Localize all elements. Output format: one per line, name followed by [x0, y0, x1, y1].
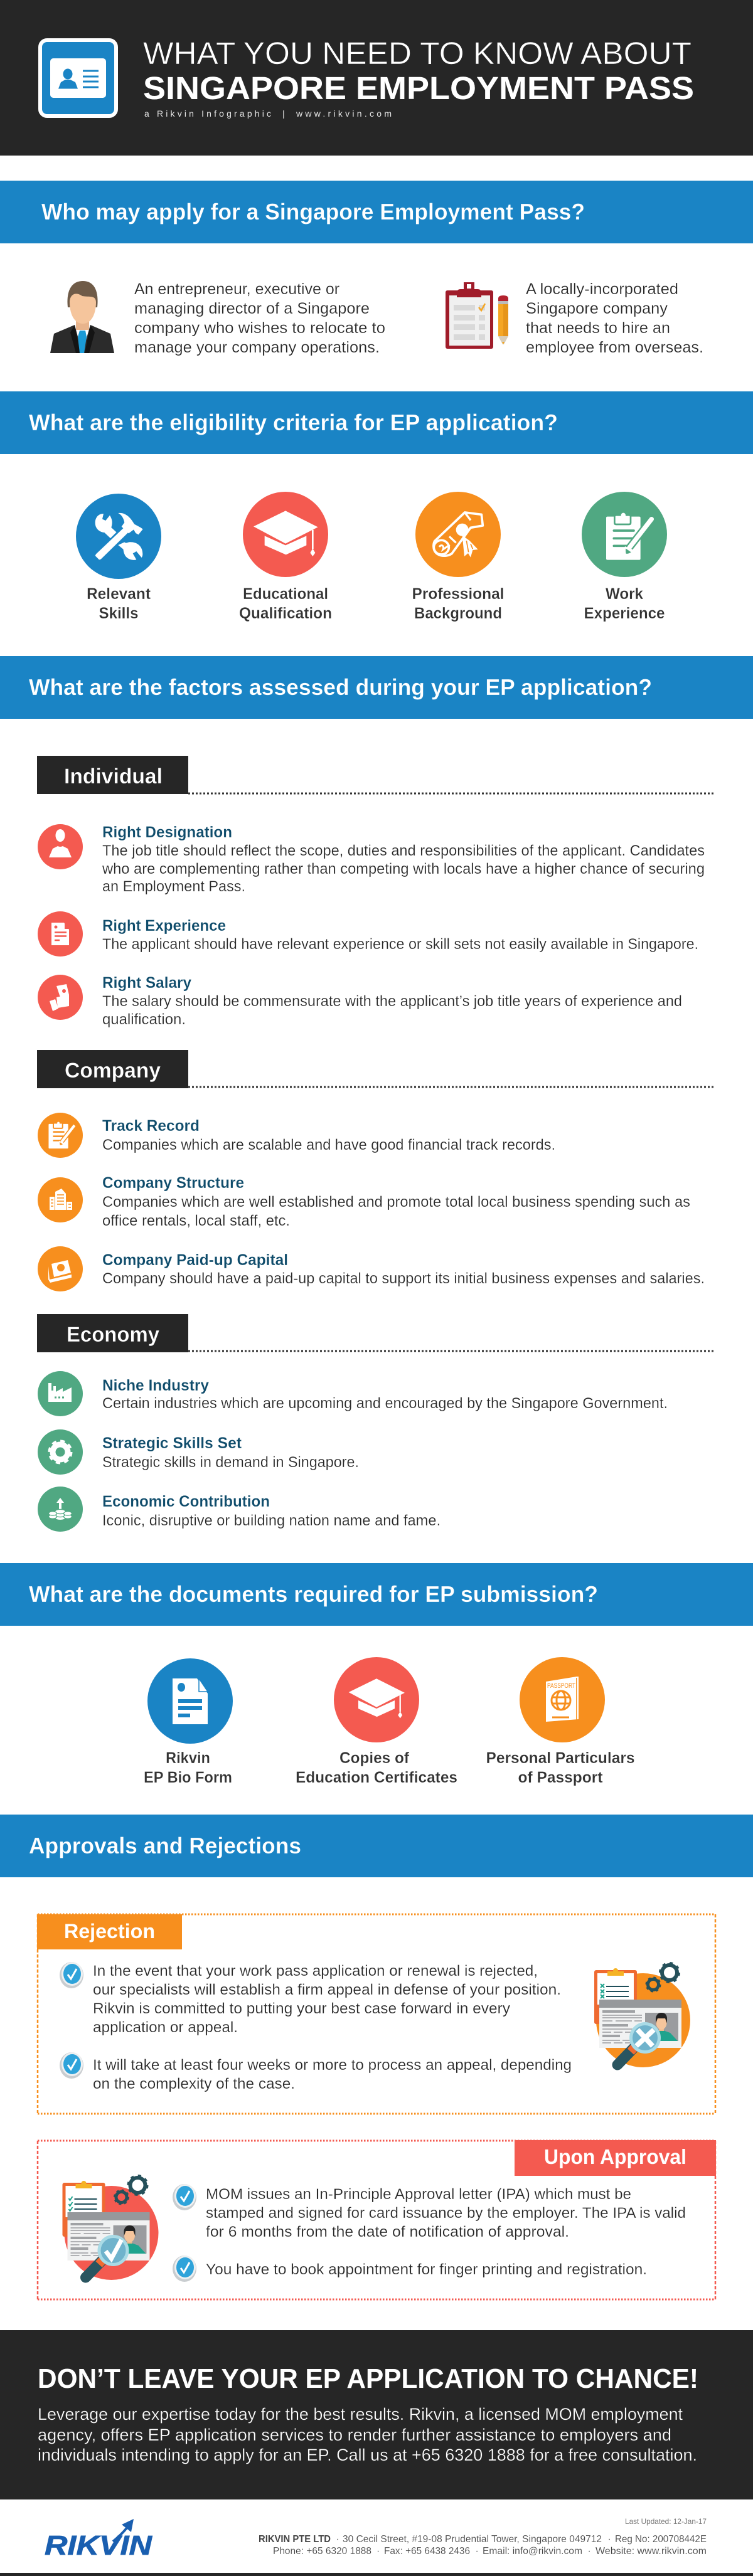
- text: finger printing: You have to book appointment for finger printing and registration.: [206, 2261, 647, 2278]
- label: passport particulars: [486, 1749, 635, 1786]
- sub-heading: company: Company: [65, 1059, 161, 1083]
- title: [143, 36, 694, 106]
- sub-heading: individual: Individual: [64, 765, 163, 788]
- text: right designation: who are complementing rather than competing with locals have a higher chance of securing: [102, 861, 705, 877]
- text: company structure: Companies which are well established and promote total local business spending such as: [102, 1194, 690, 1211]
- text: appeal duration: on the complexity of the case.: [93, 2075, 295, 2092]
- text: locally-incorporated company: A locally-incorporated: [526, 280, 678, 298]
- call to action text: [38, 2405, 697, 2464]
- text: right salary: qualification.: [102, 1011, 186, 1028]
- logo: Rikvin: [45, 2519, 152, 2561]
- tag: upon approval: Upon Approval: [544, 2145, 686, 2168]
- text: company structure: office rentals, local staff, etc.: [102, 1212, 290, 1229]
- sub-heading: individual: [37, 756, 715, 794]
- label: passport particulars: of Passport: [518, 1769, 603, 1786]
- text: niche industry: Niche Industry: [102, 1377, 209, 1394]
- text: rejection appeal: Rikvin is committed to putting your best case forward in every: [93, 2000, 510, 2017]
- call to action heading: DON’T LEAVE YOUR EP APPLICATION TO CHANCE!: [38, 2363, 698, 2394]
- text: company structure: [102, 1174, 690, 1229]
- icon: right designation: [38, 824, 83, 869]
- icon: niche industry: [38, 1371, 83, 1416]
- footer: company details: 30 Cecil Street, #19-08 Prudential Tower, Singapore 049712: [343, 2534, 602, 2545]
- label: work experience: Experience: [584, 605, 665, 622]
- icon: professional background: [415, 492, 501, 577]
- label: work experience: Work: [606, 585, 643, 603]
- panel: upon approval: [38, 2140, 716, 2299]
- text: right salary: Right Salary: [102, 974, 191, 992]
- label: passport particulars: Personal Particulars: [486, 1749, 635, 1767]
- text: strategic skills set: [102, 1434, 359, 1471]
- text: company paid-up capital: Company should have a paid-up capital to support its initial business expenses and salaries.: [102, 1270, 705, 1287]
- label: education certificates: Education Certificates: [296, 1769, 457, 1786]
- section heading: approvals and rejections: [0, 1815, 753, 1877]
- section heading: documents required: [0, 1563, 753, 1626]
- text: locally-incorporated company: Singapore company: [526, 300, 668, 317]
- title: WHAT YOU NEED TO KNOW ABOUT: [143, 36, 692, 71]
- icon: right salary: [38, 975, 83, 1020]
- text: track record: Track Record: [102, 1117, 200, 1135]
- text: strategic skills set: Strategic skills in demand in Singapore.: [102, 1454, 359, 1471]
- text: entrepreneur applicant: manage your company operations.: [134, 339, 380, 356]
- label: bio form: EP Bio Form: [144, 1769, 232, 1786]
- text: right designation: The job title should reflect the scope, duties and responsibilities of the applicant. Candidates: [102, 842, 705, 859]
- text: track record: [102, 1117, 555, 1153]
- footer: company details: RIKVIN PTE LTD: [259, 2534, 331, 2545]
- label: educational qualification: [239, 585, 332, 622]
- subtitle: a Rikvin Infographic: [144, 109, 271, 119]
- label: relevant skills: [87, 585, 151, 622]
- text: entrepreneur applicant: An entrepreneur, executive or: [134, 280, 339, 298]
- label: relevant skills: Relevant: [87, 585, 151, 603]
- footer: company details: [259, 2517, 707, 2557]
- text: right designation: an Employment Pass.: [102, 878, 245, 895]
- icon: relevant skills: [76, 494, 161, 579]
- text: locally-incorporated company: employee from overseas.: [526, 339, 703, 356]
- tag: rejection: [37, 1914, 182, 1949]
- text: right designation: [102, 824, 705, 895]
- text: niche industry: [102, 1377, 668, 1412]
- tag: upon approval: [515, 2140, 716, 2176]
- footer: company details: ·: [607, 2534, 611, 2545]
- text: appeal duration: It will take at least four weeks or more to process an appeal, depending: [93, 2057, 572, 2074]
- section heading: eligibility criteria: [0, 391, 753, 454]
- subtitle: www.rikvin.com: [296, 109, 392, 119]
- text: niche industry: Certain industries which are upcoming and encouraged by the Singapore Government.: [102, 1395, 668, 1412]
- label: education certificates: [296, 1749, 457, 1786]
- icon: check badge: [60, 2052, 83, 2079]
- text: right salary: [102, 974, 682, 1028]
- icon: check badge: [60, 1962, 83, 1988]
- text: strategic skills set: Strategic Skills Set: [102, 1434, 242, 1452]
- text: appeal duration: [93, 2057, 572, 2092]
- text: entrepreneur applicant: company who wishes to relocate to: [134, 319, 385, 337]
- text: rejection appeal: application or appeal.: [93, 2019, 238, 2036]
- text: locally-incorporated company: that needs to hire an: [526, 319, 670, 337]
- footer: company details: Last Updated: 12-Jan-17: [625, 2517, 707, 2526]
- icon: check badge: [173, 2255, 196, 2282]
- icon: passport: PASSPORT: [547, 1682, 575, 1690]
- title: SINGAPORE EMPLOYMENT PASS: [143, 70, 694, 106]
- icon: educational qualification: [243, 492, 328, 577]
- section heading: who may apply: [0, 181, 753, 243]
- section heading: who may apply: Who may apply for a Singapore Employment Pass?: [41, 199, 585, 225]
- footer: company details: Email: info@rikvin.com: [483, 2546, 582, 2557]
- section heading: documents required: What are the documents required for EP submission?: [29, 1581, 598, 1607]
- footer: company details: ·: [336, 2534, 339, 2545]
- section heading: approvals and rejections: Approvals and Rejections: [29, 1833, 301, 1858]
- text: approval letter: [206, 2186, 686, 2240]
- text: economic contribution: [102, 1493, 441, 1529]
- icon: track record: [38, 1113, 83, 1158]
- text: approval letter: for 6 months from the date of notification of approval.: [206, 2224, 569, 2240]
- text: right experience: The applicant should have relevant experience or skill sets not easily available in Singapore.: [102, 936, 698, 953]
- text: company paid-up capital: [102, 1251, 705, 1287]
- text: company paid-up capital: Company Paid-up Capital: [102, 1251, 288, 1269]
- label: professional background: Background: [414, 605, 502, 622]
- text: economic contribution: Iconic, disruptive or building nation name and fame.: [102, 1512, 441, 1529]
- label: educational qualification: Educational: [243, 585, 328, 603]
- sub-heading: economy: [37, 1314, 715, 1352]
- text: rejection appeal: In the event that your work pass application or renewal is rejected,: [93, 1963, 538, 1980]
- subtitle: |: [282, 109, 285, 119]
- panel: rejection: [37, 1914, 715, 2114]
- tag: rejection: Rejection: [64, 1920, 155, 1943]
- call to action text: individuals intending to apply for an EP. Call us at +65 6320 1888 for a free consultation.: [38, 2446, 697, 2464]
- text: track record: Companies which are scalable and have good financial track records.: [102, 1137, 555, 1153]
- footer: company details: ·: [376, 2546, 380, 2557]
- footer: company details: Reg No: 200708442E: [615, 2534, 707, 2545]
- icon: businessman: [50, 281, 114, 353]
- footer: company details: Fax: +65 6438 2436: [384, 2546, 470, 2557]
- text: approval letter: stamped and signed for card issuance by the employer. The IPA is valid: [206, 2205, 686, 2222]
- section heading: factors assessed: What are the factors assessed during your EP application?: [29, 674, 652, 700]
- label: professional background: Professional: [412, 585, 505, 603]
- footer: company details: Phone: +65 6320 1888: [273, 2546, 371, 2557]
- text: entrepreneur applicant: [134, 280, 385, 356]
- label: educational qualification: Qualification: [239, 605, 332, 622]
- sub-heading: company: [37, 1050, 715, 1088]
- sub-heading: economy: Economy: [67, 1323, 159, 1347]
- icon: passport: [520, 1657, 605, 1742]
- text: rejection appeal: [93, 1963, 561, 2036]
- text: locally-incorporated company: [526, 280, 703, 356]
- icon: company structure: [38, 1177, 83, 1222]
- icon: education certificates: [334, 1657, 419, 1742]
- text: economic contribution: Economic Contribution: [102, 1493, 270, 1510]
- subtitle: [144, 109, 392, 119]
- icon: clipboard and pencil: [446, 282, 508, 349]
- illustration: approved application: [63, 2176, 158, 2280]
- bottom bar: [0, 2573, 753, 2576]
- text: right designation: Right Designation: [102, 824, 232, 841]
- icon: economic contribution: [38, 1487, 83, 1532]
- label: work experience: [584, 585, 665, 622]
- text: right experience: Right Experience: [102, 917, 226, 935]
- icon: right experience: [38, 911, 83, 957]
- text: rejection appeal: our specialists will establish a firm appeal in defense of your position.: [93, 1981, 561, 1998]
- footer: company details: Website: www.rikvin.com: [595, 2546, 707, 2557]
- icon: company paid-up capital: [38, 1246, 83, 1291]
- text: approval letter: MOM issues an In-Principle Approval letter (IPA) which must be: [206, 2186, 631, 2203]
- call to action text: agency, offers EP application services to render further assistance to employers and: [38, 2425, 671, 2444]
- section heading: eligibility criteria: What are the eligibility criteria for EP application?: [29, 410, 558, 435]
- label: professional background: [412, 585, 505, 622]
- call to action panel: [0, 2330, 753, 2499]
- icon: employment pass card: [40, 40, 116, 116]
- label: bio form: Rikvin: [166, 1749, 210, 1767]
- footer: company details: ·: [587, 2546, 591, 2557]
- section heading: factors assessed: [0, 656, 753, 719]
- logo: Rikvin: RIKVIN: [45, 2530, 152, 2561]
- icon: strategic skills set: [38, 1429, 83, 1475]
- text: right salary: The salary should be commensurate with the applicant’s job title years of experience and: [102, 993, 682, 1010]
- icon: work experience: [582, 492, 667, 577]
- text: right experience: [102, 917, 698, 953]
- icon: bio form document: [147, 1658, 233, 1744]
- label: bio form: [144, 1749, 232, 1786]
- header panel: [0, 0, 753, 156]
- text: entrepreneur applicant: managing director of a Singapore: [134, 300, 370, 317]
- call to action text: Leverage our expertise today for the best results. Rikvin, a licensed MOM employment: [38, 2405, 683, 2424]
- illustration: rejected application: [594, 1963, 690, 2067]
- icon: check badge: [173, 2184, 196, 2210]
- label: education certificates: Copies of: [339, 1749, 410, 1767]
- text: company structure: Company Structure: [102, 1174, 244, 1192]
- label: relevant skills: Skills: [99, 605, 138, 622]
- footer: company details: ·: [476, 2546, 479, 2557]
